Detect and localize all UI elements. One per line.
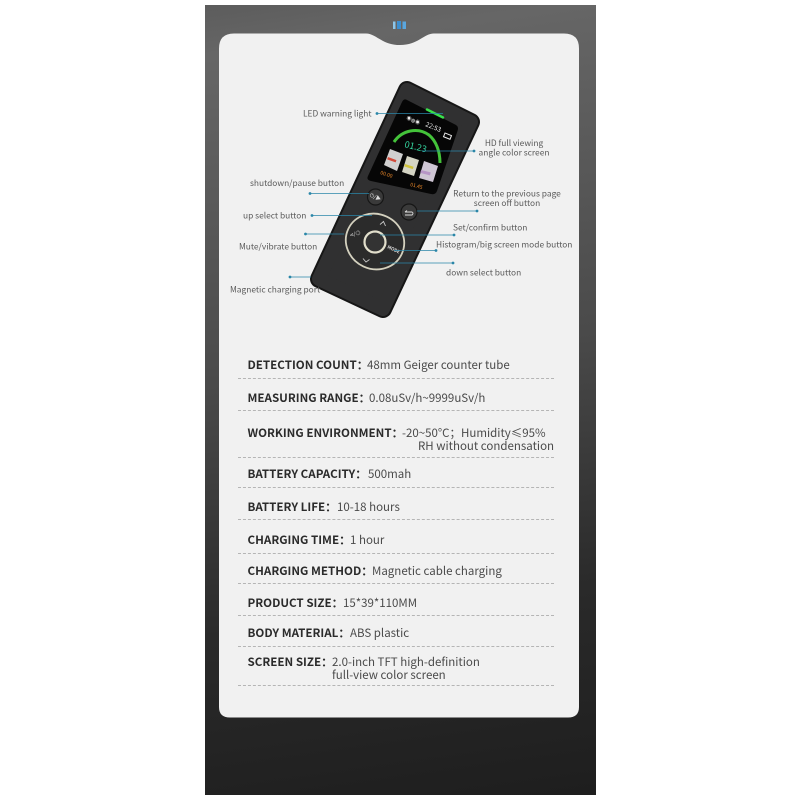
- spec: body material: BODY MATERIAL：: [248, 625, 350, 641]
- spec: working environment: -20~50°C；Humidity≤95%: [402, 425, 546, 441]
- spec: screen size: 2.0-inch TFT high-definition: [332, 654, 480, 670]
- spec: body material: [238, 625, 554, 647]
- control wheel: MODE: [386, 244, 401, 256]
- dark background panel: [205, 5, 596, 795]
- spec: screen size: SCREEN SIZE：: [248, 654, 333, 670]
- spec: battery capacity: 500mah: [368, 466, 411, 482]
- spec: working environment: [238, 425, 554, 458]
- screen status bar: [405, 114, 451, 139]
- notched white card: [219, 34, 579, 718]
- mini data cards: 01.45: [410, 181, 424, 191]
- callout: LED warning light: [303, 108, 443, 120]
- callout: magnetic charging port: [230, 276, 321, 296]
- screen status bar: ◉◍◉: [405, 114, 421, 127]
- callout: down select button: down select button: [446, 266, 521, 278]
- spec: product size: PRODUCT SIZE：: [248, 595, 343, 611]
- radiation gauge: 01.23: [403, 137, 428, 155]
- icon: top logo: [393, 21, 406, 29]
- spec: screen size: full-view color screen: [332, 667, 446, 683]
- spec: measuring range: [238, 390, 554, 411]
- spec: battery life: BATTERY LIFE：: [248, 499, 337, 515]
- spec: measuring range: 0.08uSv/h~9999uSv/h: [369, 390, 485, 406]
- spec: product size: [238, 595, 554, 616]
- spec: charging time: CHARGING TIME：: [248, 532, 351, 548]
- screen: [367, 99, 458, 194]
- callout: return button: [417, 188, 561, 212]
- spec: working environment: RH without condensation: [418, 438, 554, 454]
- spec: product size: 15*39*110MM: [343, 595, 417, 611]
- callout: histogram/big screen button: Histogram/big screen mode button: [436, 238, 572, 250]
- spec: charging method: [238, 563, 554, 584]
- screen status bar: 22:53: [424, 119, 443, 134]
- spec: measuring range: MEASURING RANGE：: [248, 390, 370, 406]
- spec: battery capacity: [238, 466, 554, 488]
- callout: up select button: up select button: [243, 210, 306, 222]
- callout: LED warning light: LED warning light: [303, 108, 372, 120]
- mini data cards: [379, 149, 438, 191]
- LED warning light: [427, 110, 443, 118]
- control wheel: ⊲/◎: [349, 229, 361, 239]
- spec: working environment: WORKING ENVIRONMENT：: [248, 425, 403, 441]
- power button: ⏻/▶: [368, 191, 383, 203]
- callout: HD screen: HD full viewing: [485, 137, 543, 149]
- back button: [401, 204, 417, 220]
- spec: detection count: 48mm Geiger counter tube: [367, 357, 510, 373]
- spec: charging time: [238, 532, 554, 554]
- device body: [319, 90, 471, 309]
- callout: magnetic charging port: Magnetic charging port: [230, 284, 321, 296]
- device illustration: [319, 90, 471, 309]
- callout: return button: Return to the previous page: [453, 188, 561, 200]
- callout: HD screen: [422, 137, 549, 158]
- callout: HD screen: angle color screen: [479, 146, 549, 158]
- spec: body material: ABS plastic: [350, 625, 409, 641]
- callout: shutdown/pause button: [250, 177, 369, 195]
- callout: set/confirm button: Set/confirm button: [453, 222, 527, 234]
- spec: charging method: CHARGING METHOD：: [248, 563, 373, 579]
- spec: detection count: DETECTION COUNT：: [248, 357, 368, 373]
- spec: charging method: Magnetic cable charging: [372, 563, 502, 579]
- spec: screen size: [238, 654, 554, 686]
- callout: return button: screen off button: [474, 197, 540, 209]
- spec: battery life: [238, 499, 554, 520]
- callout: up select button: [243, 210, 372, 222]
- control wheel: [337, 204, 413, 279]
- power button: [368, 189, 384, 205]
- callout: mute/vibrate button: [239, 233, 344, 252]
- callout: shutdown/pause button: shutdown/pause button: [250, 177, 344, 189]
- spec: charging time: 1 hour: [350, 532, 384, 548]
- spec: battery life: 10-18 hours: [337, 499, 400, 515]
- callout: mute/vibrate button: Mute/vibrate button: [239, 240, 317, 252]
- mini data cards: 00.00: [379, 169, 394, 180]
- spec: battery capacity: BATTERY CAPACITY：: [248, 466, 367, 482]
- spec: detection count: [238, 357, 554, 379]
- radiation gauge: [394, 131, 440, 163]
